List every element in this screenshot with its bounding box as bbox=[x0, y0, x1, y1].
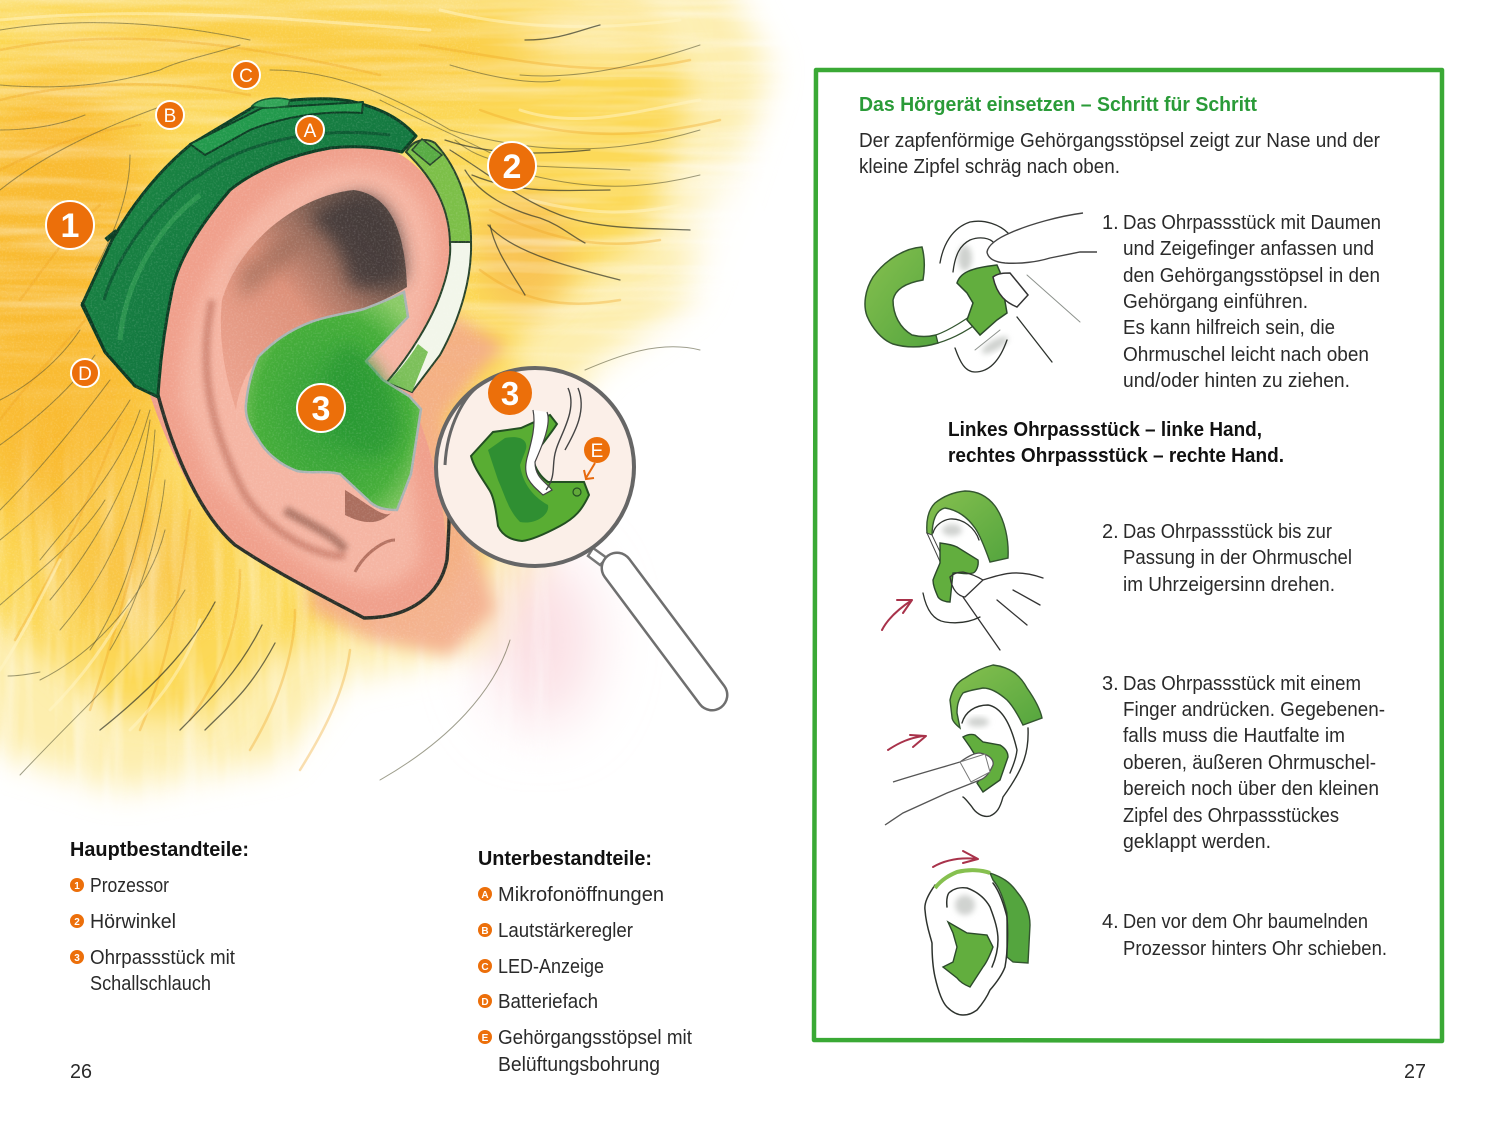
step 4 text: Prozessor hinters Ohr schieben. bbox=[1123, 938, 1387, 960]
badge 1: 1 bbox=[61, 207, 79, 245]
step 3 illustration bbox=[885, 665, 1042, 825]
step 2 text bbox=[1102, 521, 1352, 596]
badge 3: 3 bbox=[312, 390, 330, 428]
step 1 text: und/oder hinten zu ziehen. bbox=[1123, 370, 1350, 392]
bullet 3 bbox=[70, 950, 84, 964]
bullet E: E bbox=[482, 1033, 489, 1044]
badge 2: 2 bbox=[503, 148, 521, 186]
step 1 illustration bbox=[865, 213, 1097, 372]
step 2 text: 2. bbox=[1102, 521, 1119, 543]
legend: sub parts: Belüftungsbohrung bbox=[498, 1054, 660, 1076]
step 4 text: Den vor dem Ohr baumelnden bbox=[1123, 911, 1368, 933]
red arrow bbox=[933, 851, 978, 867]
legend: sub parts: Batteriefach bbox=[498, 991, 598, 1013]
step 2 text: Das Ohrpassstück bis zur bbox=[1123, 521, 1332, 543]
legend: main parts: Hörwinkel bbox=[90, 911, 176, 933]
bullet C bbox=[478, 959, 492, 973]
legend: main parts: Hauptbestandteile: bbox=[70, 839, 249, 861]
legend: main parts bbox=[70, 839, 249, 995]
badge 1 bbox=[46, 201, 94, 249]
bullet 1 bbox=[70, 878, 84, 892]
bullet 1: 1 bbox=[74, 881, 80, 892]
bullet B bbox=[478, 923, 492, 937]
red arrow bbox=[882, 600, 912, 630]
bullet 2: 2 bbox=[74, 917, 80, 928]
badge B: B bbox=[164, 106, 176, 127]
badge E bbox=[584, 437, 610, 463]
step 2 text: Passung in der Ohrmuschel bbox=[1123, 547, 1352, 569]
badge D: D bbox=[78, 364, 92, 385]
intro text bbox=[859, 130, 1380, 178]
step 1 text: und Zeigefinger anfassen und bbox=[1123, 238, 1374, 260]
badge D bbox=[71, 359, 99, 387]
hearing hook and tube bbox=[387, 139, 471, 392]
ear bbox=[150, 139, 455, 618]
step 2 text: im Uhrzeigersinn drehen. bbox=[1123, 574, 1335, 596]
texture: pencil streaks bbox=[0, 0, 800, 420]
legend: sub parts: Unterbestandteile: bbox=[478, 848, 652, 870]
panel heading: Das Hörgerät einsetzen – Schritt für Schritt bbox=[859, 94, 1257, 116]
legend: sub parts: Lautstärkeregler bbox=[498, 920, 633, 942]
bold hand note: rechtes Ohrpassstück – rechte Hand. bbox=[948, 445, 1284, 467]
step 1 text bbox=[1102, 212, 1381, 392]
badge B bbox=[156, 101, 184, 129]
background: hair colouring bbox=[0, 0, 800, 830]
badge 3 bbox=[297, 384, 345, 432]
step 4 illustration bbox=[925, 851, 1030, 1015]
red arrow bbox=[888, 735, 926, 750]
bold hand note bbox=[948, 419, 1284, 467]
bullet D bbox=[478, 994, 492, 1008]
intro text: kleine Zipfel schräg nach oben. bbox=[859, 156, 1120, 178]
bullet E bbox=[478, 1030, 492, 1044]
step 1 text: Es kann hilfreich sein, die bbox=[1123, 317, 1335, 339]
bullet B: B bbox=[481, 926, 489, 937]
badge 2 bbox=[488, 142, 536, 190]
step 3 text: oberen, äußeren Ohrmuschel- bbox=[1123, 752, 1376, 774]
step 1 text: Ohrmuschel leicht nach oben bbox=[1123, 344, 1369, 366]
bullet C: C bbox=[481, 962, 489, 973]
magnifying glass bbox=[436, 368, 712, 695]
hair strokes bbox=[0, 10, 720, 780]
callout badges bbox=[46, 61, 610, 463]
step 3 text bbox=[1102, 673, 1385, 853]
badge A bbox=[296, 116, 324, 144]
badge C bbox=[232, 61, 260, 89]
step 3 text: falls muss die Hautfalte im bbox=[1123, 725, 1345, 747]
texture: pencil grain bbox=[0, 0, 480, 640]
badge A: A bbox=[304, 121, 317, 142]
bullet D: D bbox=[481, 997, 489, 1008]
step 1 text: Gehörgang einführen. bbox=[1123, 291, 1308, 313]
badge E: E bbox=[591, 441, 603, 462]
step 3 text: bereich noch über den kleinen bbox=[1123, 778, 1379, 800]
badge C: C bbox=[239, 66, 253, 87]
bullet A bbox=[478, 887, 492, 901]
step 2 illustration bbox=[882, 491, 1043, 650]
intro text: Der zapfenförmige Gehörgangsstöpsel zeigt zur Nase und der bbox=[859, 130, 1380, 152]
step 1 text: den Gehörgangsstöpsel in den bbox=[1123, 265, 1380, 287]
illustration: ear with hearing aid bbox=[0, 0, 800, 830]
ear mould bbox=[246, 292, 421, 510]
step 4 text: 4. bbox=[1102, 911, 1119, 933]
legend: sub parts: Mikrofonöffnungen bbox=[498, 884, 664, 906]
step 3 text: Zipfel des Ohrpassstückes bbox=[1123, 805, 1339, 827]
page number 27: 27 bbox=[1404, 1061, 1426, 1083]
hearing aid processor bbox=[82, 98, 416, 397]
step 1 text: 1. bbox=[1102, 212, 1119, 234]
step 1 text: Das Ohrpassstück mit Daumen bbox=[1123, 212, 1381, 234]
step 4 text bbox=[1102, 911, 1387, 960]
bullet 3: 3 bbox=[74, 953, 80, 964]
step 3 text: Finger andrücken. Gegebenen- bbox=[1123, 699, 1385, 721]
legend: sub parts bbox=[478, 848, 692, 1076]
legend: sub parts: LED-Anzeige bbox=[498, 956, 604, 978]
bullet A: A bbox=[481, 890, 489, 901]
legend: sub parts: Gehörgangsstöpsel mit bbox=[498, 1027, 692, 1049]
step 3 text: 3. bbox=[1102, 673, 1119, 695]
legend: main parts: Ohrpassstück mit bbox=[90, 947, 235, 969]
badge 3 magnified bbox=[488, 371, 532, 415]
legend: main parts: Prozessor bbox=[90, 875, 169, 897]
badge 3 magnified: 3 bbox=[501, 375, 519, 412]
page number 26: 26 bbox=[70, 1061, 92, 1083]
step 3 text: geklappt werden. bbox=[1123, 831, 1271, 853]
bullet 2 bbox=[70, 914, 84, 928]
panel: step by step frame bbox=[814, 70, 1442, 1041]
step 3 text: Das Ohrpassstück mit einem bbox=[1123, 673, 1361, 695]
legend: main parts: Schallschlauch bbox=[90, 973, 211, 995]
bold hand note: Linkes Ohrpassstück – linke Hand, bbox=[948, 419, 1262, 441]
